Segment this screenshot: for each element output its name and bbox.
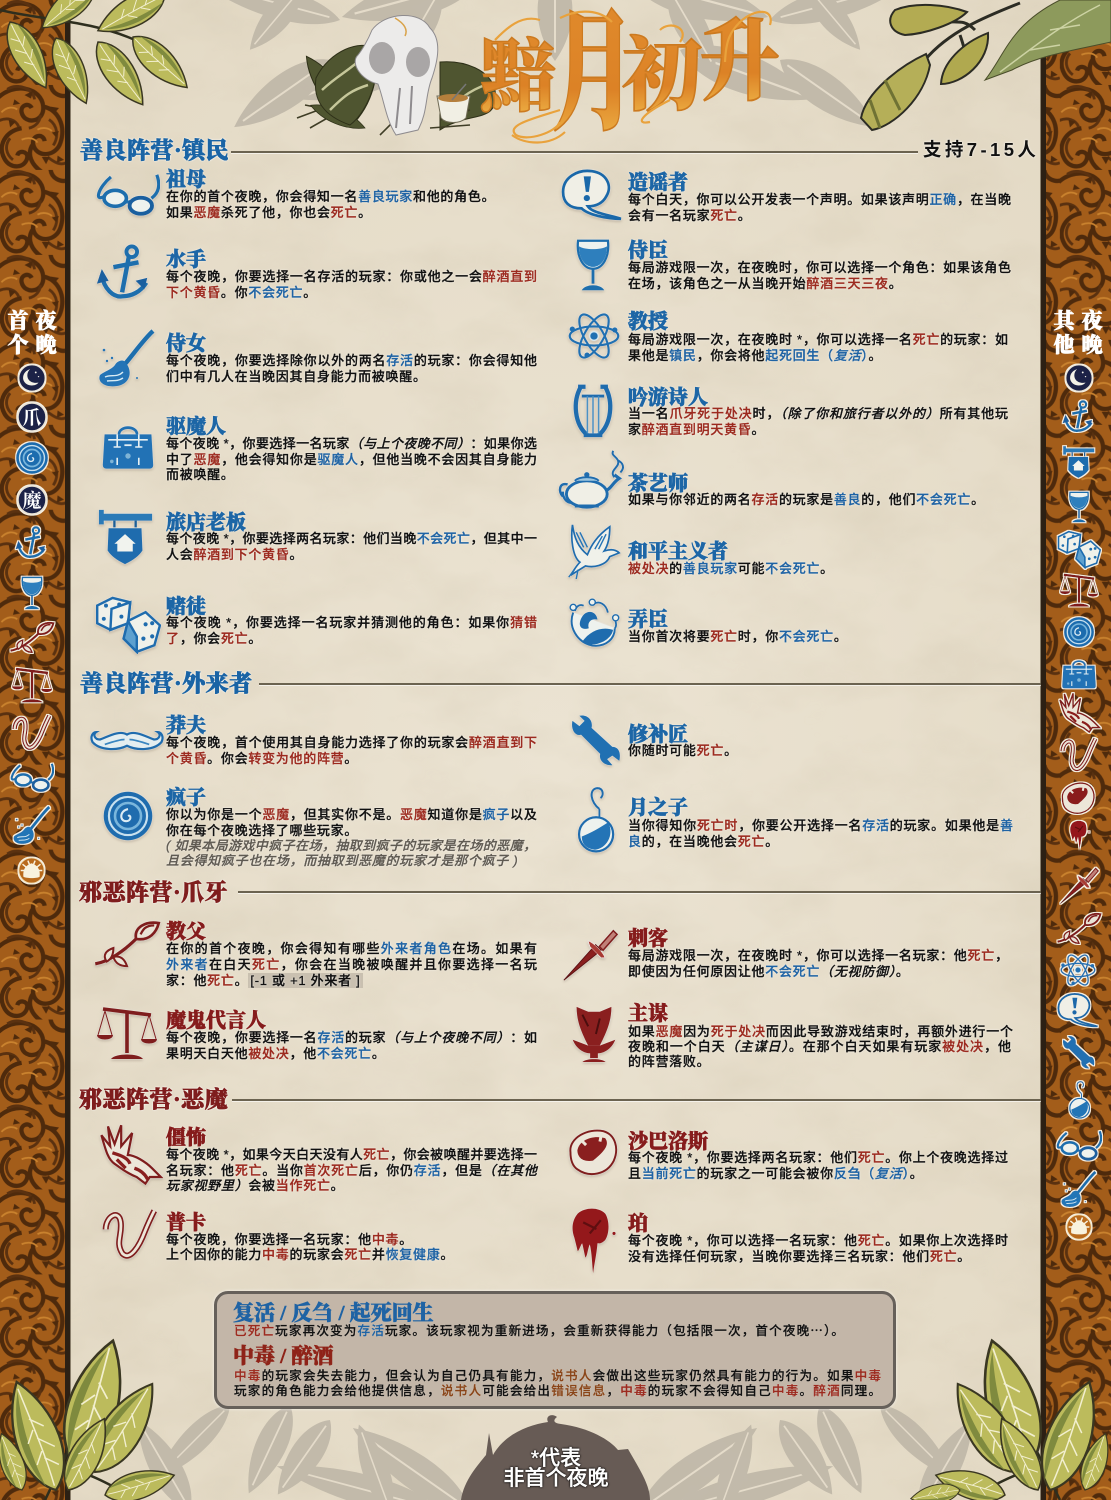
ability text: 如果恶魔因为死于处决而因此导致游戏结束时，再额外进行一个	[628, 1024, 1013, 1039]
ability text: 每个夜晚 *，你要选择两名玩家：他们当晚不会死亡，但其中一	[166, 531, 537, 546]
icon: mouth	[567, 1126, 619, 1178]
other nights order icons	[1058, 365, 1101, 1239]
role: 侍女: 们中有几人在当晚因其自身能力而被唤醒。	[166, 369, 427, 384]
right sidebar heading 其他夜晚: 夜	[1082, 309, 1102, 333]
role: 茶艺师	[558, 450, 985, 512]
bottom right leaves	[909, 1334, 1111, 1500]
role: 主谋: 的阵营落败。	[628, 1054, 710, 1069]
name: 教授	[628, 311, 668, 333]
left sidebar heading 首个夜晚: 夜	[36, 309, 56, 333]
title 黯月初升: 初	[622, 33, 702, 121]
role: 祖母: 如果恶魔杀死了他，你也会死亡。	[166, 205, 372, 220]
ability text: 如果与你邻近的两名存活的玩家是善良的，他们不会死亡。	[628, 492, 985, 507]
icon: anchor	[96, 244, 149, 302]
role: 侍臣: 在场，该角色之一从当晚开始醉酒三天三夜。	[628, 276, 902, 291]
role: 沙巴洛斯: 且当前死亡的玩家之一可能会被你反刍（复活）。	[628, 1166, 923, 1181]
ability text: 每个夜晚，你要选择一名存活的玩家：你或他之一会醉酒直到	[166, 269, 537, 284]
role: 水手: 下个黄昏。你不会死亡。	[166, 285, 317, 300]
heading: evil demons: 邪恶阵营·恶魔	[79, 1087, 228, 1112]
icon: goblet	[575, 239, 611, 293]
footnote	[476, 1449, 636, 1493]
role: 僵怖: 名玩家：他死亡。当你首次死亡后，你仍存活，但是（在其他	[166, 1163, 537, 1178]
role: 赌徒: 了，你会死亡。	[166, 631, 262, 646]
name: 祖母	[166, 169, 206, 191]
role: 教父: 外来者在白天死亡，你会在当晚被唤醒并且你要选择一名玩	[166, 957, 537, 972]
role: 教授: 果他是镇民，你会将他起死回生（复活）。	[628, 348, 882, 363]
name: 驱魔人	[166, 416, 226, 438]
icon: mop	[98, 329, 155, 389]
role: 月之子	[555, 794, 1015, 849]
role: 主谋: 夜晚和一个白天（主谋日）。在那个白天如果有玩家被处决，他	[628, 1039, 1011, 1054]
ability text: 当你得知你死亡时，你要公开选择一名存活的玩家。如果他是善	[628, 818, 1013, 833]
text: revive: 已死亡玩家再次变为存活玩家。该玩家视为重新进场，会重新获得能力（包括限一次，首个夜晚⋯）。	[234, 1324, 844, 1338]
role: 侍女	[98, 329, 537, 389]
role: 教父	[90, 918, 540, 988]
ability text: 每个夜晚 *，你要选择两名玩家：他们死亡。你上个夜晚选择过	[628, 1150, 1008, 1165]
heading: poison: 中毒 / 醉酒	[233, 1344, 333, 1368]
role: 沙巴洛斯	[555, 1128, 1015, 1181]
ability text: 每个夜晚 *，如果今天白天没有人死亡，你会被唤醒并要选择一	[166, 1147, 537, 1162]
name: 教父	[166, 921, 206, 943]
icon: lyre	[572, 384, 614, 440]
icon: glasses	[96, 174, 161, 218]
ability text: 每个夜晚 *，你要选择一名玩家（与上个夜晚不同）：如果你选	[166, 436, 537, 451]
role: 侍臣	[575, 239, 1011, 293]
ability text: 每个夜晚 *，你可以选择一名玩家：他死亡。如果你上次选择时	[628, 1233, 1008, 1248]
icon: whip	[102, 1207, 158, 1263]
role: 莽夫: 个黄昏。你会转变为他的阵营。	[166, 751, 358, 766]
role: 吟游诗人: 家醉酒直到明天黄昏。	[628, 422, 765, 437]
ability text: 被处决的善良玩家可能不会死亡。	[628, 561, 834, 576]
right sidebar heading 其他夜晚: 其	[1054, 309, 1078, 333]
heading: evil minions: 邪恶阵营·爪牙	[79, 880, 228, 905]
role: 刺客: 即使因为任何原因让他不会死亡（无视防御）。	[628, 964, 910, 979]
role: 魔鬼代言人	[90, 1007, 540, 1061]
icon: bag	[102, 426, 154, 472]
role: 珀: 没有选择任何玩家，当晚你要选择三名玩家：他们死亡。	[628, 1249, 971, 1264]
role: 普卡: 上个因你的能力中毒的玩家会死亡并恢复健康。	[166, 1247, 454, 1262]
role: 教父: 家：他死亡。[-1 或 +1 外来者 ]	[166, 973, 360, 988]
right sidebar heading 其他夜晚: 他	[1054, 333, 1074, 357]
role: 教授	[567, 310, 1008, 363]
name: 赌徒	[166, 596, 206, 618]
right sidebar heading 其他夜晚	[1054, 309, 1102, 357]
role: 疯子	[90, 784, 540, 868]
role: 疯子: ( 如果本局游戏中疯子在场，抽取到疯子的玩家是在场的恶魔，	[166, 838, 536, 853]
role: 驱魔人: 中了恶魔，他会得知你是驱魔人，但他当晚不会因其自身能力	[166, 452, 537, 467]
icon: scales	[97, 1003, 157, 1063]
ability text: 每个夜晚 *，你要选择一名玩家并猜测他的角色：如果你猜错	[166, 615, 537, 630]
bottom left leaves	[0, 1334, 178, 1500]
name: 月之子	[628, 797, 688, 819]
first night order icons	[11, 365, 53, 883]
icon: pendant	[562, 787, 628, 853]
icon: moustache	[89, 730, 165, 753]
left side bar	[0, 0, 71, 1500]
glossary panel	[214, 1291, 896, 1409]
left sidebar heading 首个夜晚: 晚	[36, 333, 56, 357]
heading: good townsfolk: 善良阵营·镇民	[80, 138, 229, 163]
top right leaf and buds	[861, 0, 1111, 130]
title 黯月初升: 升	[700, 15, 780, 112]
role: 疯子: 且会得知疯子也在场，而抽取到恶魔的玩家才是那个疯子 )	[166, 853, 518, 868]
role: 疯子: 你在每个夜晚选择了哪些玩家。	[166, 823, 358, 838]
ability text: 你随时可能死亡。	[628, 743, 738, 758]
glossary panel: 玩家的角色能力会给他提供信息，说书人可能会给出错误信息，中毒的玩家不会得知自己中毒。醉酒同理。	[234, 1384, 881, 1398]
first night order icons: 魔	[22, 490, 42, 512]
role: 造谣者: 会有一名玩家死亡。	[628, 208, 752, 223]
role: 刺客	[555, 925, 1015, 979]
role: 月之子: 良的，在当晚他会死亡。	[628, 834, 779, 849]
name: 魔鬼代言人	[166, 1010, 266, 1032]
left sidebar heading 首个夜晚: 个	[8, 333, 28, 357]
heading: revive: 复活 / 反刍 / 起死回生	[233, 1301, 434, 1325]
name: 沙巴洛斯	[628, 1131, 708, 1153]
name: 主谋	[628, 1003, 668, 1025]
icon: chair	[565, 1005, 623, 1063]
role: 普卡	[90, 1209, 540, 1262]
footnote: 非首个夜晚	[504, 1467, 608, 1490]
role: 魔鬼代言人: 果明天白天他被处决，他不会死亡。	[166, 1046, 386, 1061]
icon: dagger	[562, 926, 618, 982]
role: 修补匠	[555, 721, 1015, 758]
footnote: *代表	[531, 1447, 581, 1470]
role: 莽夫	[89, 714, 537, 766]
icon: rose	[93, 914, 161, 982]
left sidebar heading 首个夜晚	[8, 309, 56, 357]
role: 祖母	[96, 168, 495, 220]
name: 修补匠	[628, 724, 688, 746]
role: 驱魔人: 而被唤醒。	[166, 467, 235, 482]
right side bar	[1040, 40, 1111, 1500]
role: 旅店老板	[98, 510, 537, 566]
icon: spiral	[102, 790, 154, 842]
role: 主谋	[555, 1000, 1015, 1069]
first night order icons: 爪	[22, 407, 42, 429]
icon: jester	[568, 598, 621, 650]
ability text: 在你的首个夜晚，你会得知有哪些外来者角色在场。如果有	[166, 941, 537, 956]
ability text: 每个夜晚，首个使用其自身能力选择了你的玩家会醉酒直到下	[166, 735, 537, 750]
icon: teapot	[558, 450, 626, 512]
role: 吟游诗人	[572, 384, 1008, 440]
name: 茶艺师	[628, 473, 688, 495]
ability text: 当一名爪牙死于处决时，（除了你和旅行者以外的）所有其他玩	[628, 406, 1008, 421]
top left leaves	[0, 0, 197, 113]
ability text: 每局游戏限一次，在夜晚时 *，你可以选择一名玩家：他死亡，	[628, 948, 1008, 963]
title 黯月初升	[480, 1, 780, 148]
left sidebar heading 首个夜晚: 首	[8, 309, 28, 333]
ability text: 每个夜晚，你要选择一名存活的玩家（与上个夜晚不同）：如	[166, 1030, 537, 1045]
icon: atom	[567, 312, 621, 361]
icon: hand	[97, 1122, 163, 1188]
name: 弄臣	[628, 609, 668, 631]
name: 僵怖	[166, 1127, 206, 1149]
name: 莽夫	[166, 715, 206, 737]
role: 僵怖	[90, 1124, 540, 1193]
icon: dove	[568, 524, 621, 581]
role: 赌徒	[94, 595, 537, 656]
ability text: 当你首次将要死亡时，你不会死亡。	[628, 629, 848, 644]
ability text: 你以为你是一个恶魔，但其实你不是。恶魔知道你是疯子以及	[166, 807, 537, 822]
skull and botanical title art	[297, 15, 496, 135]
name: 刺客	[628, 928, 668, 950]
name: 和平主义者	[628, 541, 728, 563]
icon: dice	[94, 596, 162, 656]
role: 造谣者	[560, 169, 1011, 223]
player count: 支持7-15人	[923, 139, 1039, 160]
silhouette behind the footnote	[461, 1415, 650, 1500]
ability text: 每局游戏限一次，在夜晚时，你可以选择一个角色：如果该角色	[628, 260, 1011, 275]
name: 吟游诗人	[628, 387, 708, 409]
name: 旅店老板	[166, 512, 246, 534]
name: 侍女	[166, 333, 206, 355]
icon: blood	[559, 1207, 625, 1273]
role: 珀	[555, 1210, 1015, 1264]
role: 僵怖: 玩家视野里）会被当作死亡。	[166, 1178, 344, 1193]
text: poison: 中毒的玩家会失去能力，但会认为自己仍具有能力，说书人会做出这些玩家仍然具有能力的行为。如果中毒	[234, 1369, 881, 1383]
title 黯月初升: 黯	[480, 32, 556, 121]
name: 造谣者	[628, 172, 688, 194]
ability text: 每局游戏限一次，在夜晚时 *，你可以选择一名死亡的玩家：如	[628, 332, 1008, 347]
role: 和平主义者	[568, 524, 834, 581]
icon: wrench	[569, 714, 621, 766]
name: 普卡	[166, 1212, 206, 1234]
name: 侍臣	[628, 240, 668, 262]
name: 疯子	[166, 787, 206, 809]
role: 驱魔人	[102, 415, 537, 482]
ability text: 每个白天，你可以公开发表一个声明。如果该声明正确，在当晚	[628, 192, 1011, 207]
ability text: 每个夜晚，你要选择除你以外的两名存活的玩家：你会得知他	[166, 353, 537, 368]
name: 水手	[166, 249, 206, 271]
role: 水手	[96, 244, 537, 302]
name: 珀	[628, 1213, 648, 1235]
heading: good outsiders: 善良阵营·外来者	[80, 671, 253, 696]
icon: speech bubble	[560, 169, 622, 223]
ability text: 每个夜晚，你要选择一名玩家：他中毒。	[166, 1232, 413, 1247]
icon: inn sign	[98, 510, 154, 566]
role: 旅店老板: 人会醉酒到下个黄昏。	[166, 547, 303, 562]
right sidebar heading 其他夜晚: 晚	[1082, 333, 1102, 357]
role: 弄臣	[568, 598, 848, 650]
ability text: 在你的首个夜晚，你会得知一名善良玩家和他的角色。	[166, 189, 495, 204]
title 黯月初升: 月	[551, 1, 636, 148]
